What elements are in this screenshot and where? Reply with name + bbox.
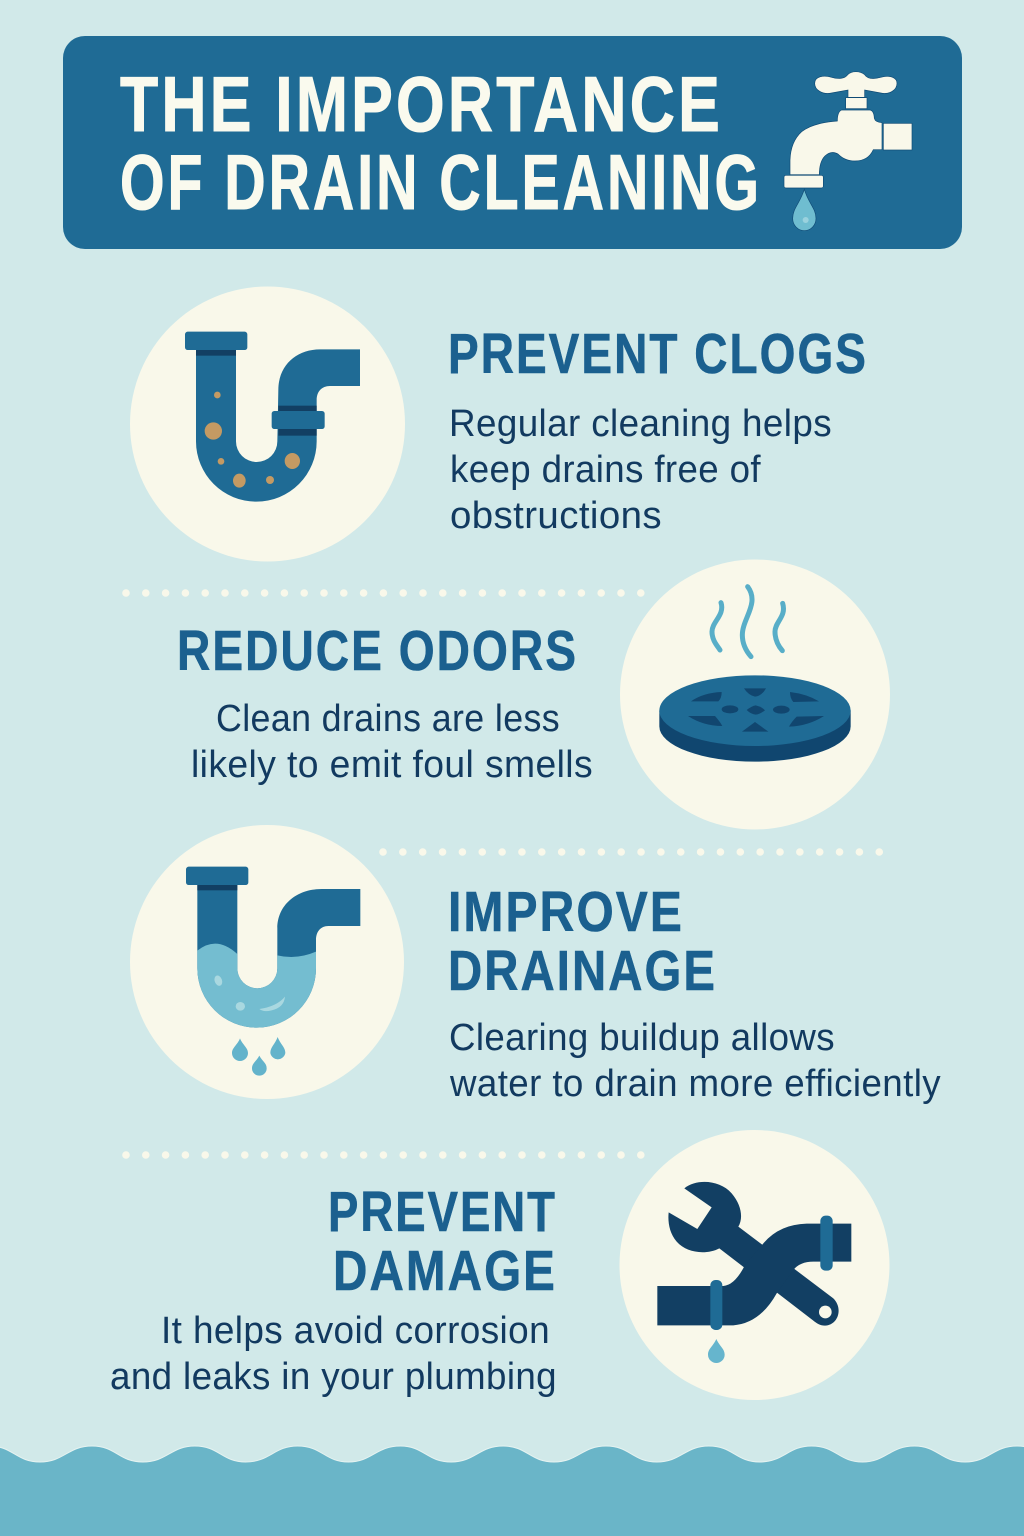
- text: improve drainage body: [449, 1017, 941, 1105]
- panel: improve drainage: [130, 825, 941, 1105]
- icon: drain cover with odor: [620, 560, 890, 830]
- title: OF DRAIN CLEANING: [120, 138, 762, 226]
- text: prevent damage body: It helps avoid corrosion: [161, 1310, 550, 1352]
- heading: prevent damage: DAMAGE: [333, 1239, 557, 1303]
- text: reduce odors body: [191, 698, 593, 786]
- title: [120, 60, 762, 226]
- panel: reduce odors: [177, 560, 890, 830]
- text: reduce odors body: Clean drains are less: [216, 698, 560, 740]
- header banner: [63, 36, 962, 249]
- text: prevent clogs body: Regular cleaning helps: [449, 403, 832, 445]
- text: prevent damage body: [110, 1310, 557, 1398]
- icon: faucet: [784, 72, 912, 231]
- text: improve drainage body: water to drain more efficiently: [449, 1063, 941, 1105]
- heading: improve drainage: [448, 880, 717, 1003]
- panel: prevent damage: [110, 1130, 890, 1400]
- water wave footer: [0, 1446, 1024, 1536]
- heading: prevent damage: [328, 1180, 557, 1303]
- text: prevent clogs body: obstructions: [450, 495, 662, 537]
- text: prevent damage body: and leaks in your plumbing: [110, 1356, 557, 1398]
- icon: clogged pipe: [130, 286, 405, 562]
- icon: wrench and leaking pipe: [620, 1130, 890, 1400]
- text: improve drainage body: Clearing buildup allows: [449, 1017, 835, 1059]
- text: reduce odors body: likely to emit foul smells: [191, 744, 593, 786]
- text: prevent clogs body: keep drains free of: [450, 449, 761, 491]
- title: THE IMPORTANCE: [120, 60, 723, 148]
- heading: reduce odors: REDUCE ODORS: [177, 619, 578, 683]
- text: prevent clogs body: [449, 403, 832, 537]
- heading: improve drainage: DRAINAGE: [448, 939, 717, 1003]
- heading: prevent clogs: PREVENT CLOGS: [448, 322, 868, 386]
- panel: prevent clogs: [130, 286, 868, 562]
- heading: improve drainage: IMPROVE: [448, 880, 684, 944]
- heading: prevent damage: PREVENT: [328, 1180, 557, 1244]
- icon: pipe with flowing water: [130, 825, 404, 1099]
